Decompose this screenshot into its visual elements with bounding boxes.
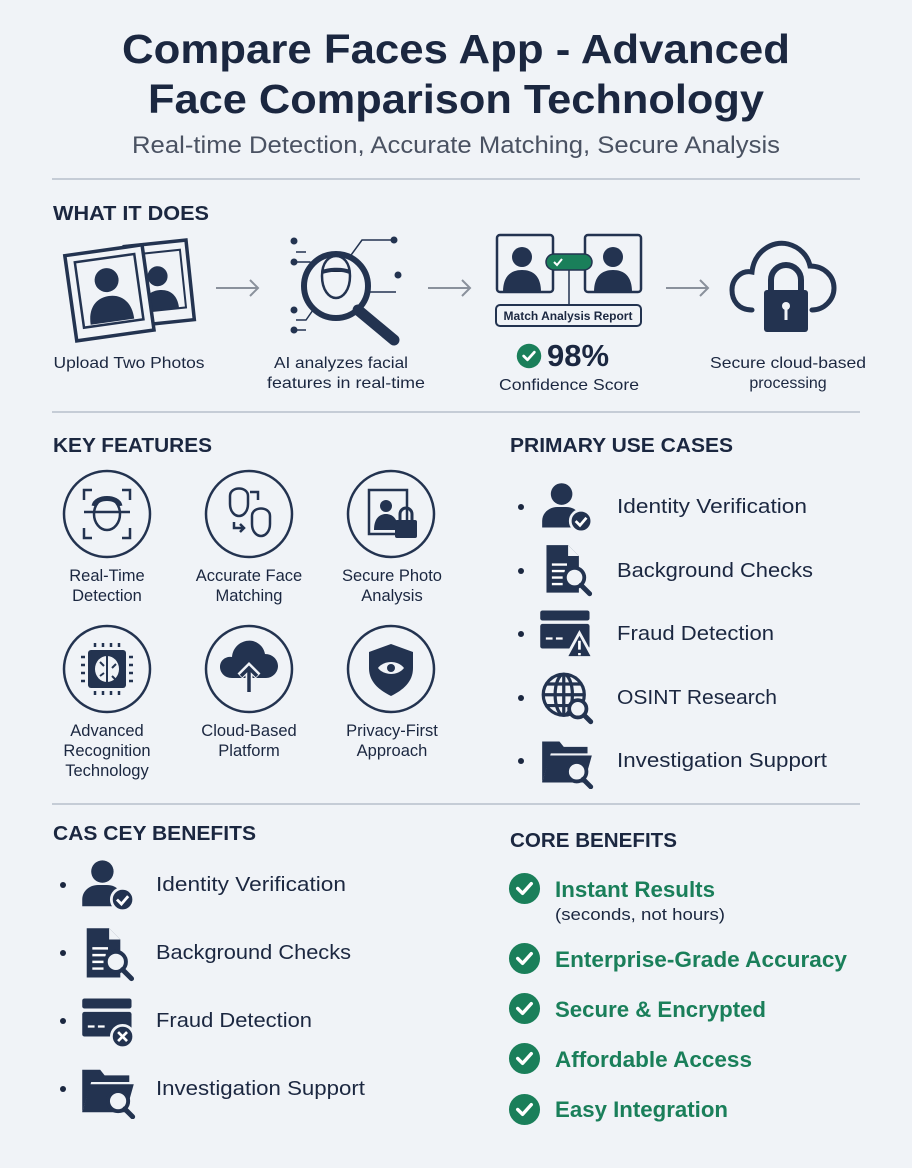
labels: Privacy-First xyxy=(346,722,438,740)
labels: Recognition xyxy=(63,742,151,760)
labels: Detection xyxy=(72,587,142,605)
icon: face matching xyxy=(230,488,270,536)
label: secure: Secure cloud-based xyxy=(710,355,866,372)
title: Face Comparison Technology xyxy=(148,76,764,122)
subtitle: Real-time Detection, Accurate Matching, Secure Analysis xyxy=(132,132,780,159)
panel: cas cey benefits xyxy=(53,823,365,1117)
text: features in real-time xyxy=(267,375,425,392)
label: AI analyzes: AI analyzes facial xyxy=(274,355,408,372)
arrow xyxy=(428,280,470,296)
panel: primary use cases: Background Checks xyxy=(617,559,813,582)
icon: chip brain xyxy=(81,643,133,695)
title xyxy=(122,26,790,122)
icon: magnifier analysis xyxy=(290,236,402,340)
labels: Real-Time xyxy=(69,567,145,585)
labels: Platform xyxy=(218,742,280,760)
panel: primary use cases: Identity Verification xyxy=(617,495,807,518)
panel: primary use cases xyxy=(510,435,827,787)
labels: Technology xyxy=(65,762,149,780)
icon: shield eye xyxy=(369,644,413,696)
score: Confidence Score xyxy=(499,377,639,394)
icon: face scan xyxy=(84,490,130,538)
panel: core benefits: Affordable Access xyxy=(555,1047,752,1072)
panel: cas cey benefits: Background Checks xyxy=(156,941,351,964)
labels: Matching xyxy=(216,587,282,605)
heading: cas cey benefits: CAS CEY BENEFITS xyxy=(53,823,256,845)
labels: Advanced xyxy=(70,722,144,740)
heading: core benefits: CORE BENEFITS xyxy=(510,830,677,852)
icon: two photos xyxy=(65,240,194,341)
panel: primary use cases: Fraud Detection xyxy=(617,622,774,645)
arrow xyxy=(216,280,258,296)
icon: cloud upload xyxy=(220,641,278,692)
panel: cas cey benefits: Investigation Support xyxy=(156,1077,365,1100)
panel: primary use cases: Investigation Support xyxy=(617,749,827,772)
panel: core benefits: (seconds, not hours) xyxy=(555,906,725,924)
heading: primary use cases: PRIMARY USE CASES xyxy=(510,435,733,457)
heading: key features: KEY FEATURES xyxy=(53,435,212,457)
panel: core benefits xyxy=(509,830,848,1125)
labels: Approach xyxy=(357,742,427,760)
title: Compare Faces App - Advanced xyxy=(122,26,790,72)
panel: core benefits: Secure & Encrypted xyxy=(555,997,766,1022)
panel: core benefits: Easy Integration xyxy=(555,1097,728,1122)
panel: primary use cases: OSINT Research xyxy=(617,686,777,709)
labels: Cloud-Based xyxy=(201,722,297,740)
heading: what it does: WHAT IT DOES xyxy=(53,203,209,225)
panel: cas cey benefits: Fraud Detection xyxy=(156,1009,312,1032)
arrow xyxy=(666,280,708,296)
labels: Analysis xyxy=(361,587,423,605)
text: processing xyxy=(749,375,827,392)
labels xyxy=(63,567,442,780)
panel: core benefits: Enterprise-Grade Accuracy xyxy=(555,947,848,972)
icon: match report xyxy=(496,235,641,326)
labels: Accurate Face xyxy=(196,567,302,585)
icon: cloud lock xyxy=(732,243,834,332)
panel: key features xyxy=(53,435,442,780)
label: upload: Upload Two Photos xyxy=(54,355,204,372)
icon: match report: Match Analysis Report xyxy=(504,309,632,323)
icon: secure photo xyxy=(369,490,417,538)
panel: cas cey benefits: Identity Verification xyxy=(156,873,346,896)
score xyxy=(499,338,639,394)
panel: core benefits: Instant Results xyxy=(555,877,715,902)
labels: Secure Photo xyxy=(342,567,442,585)
score: 98% xyxy=(547,338,609,373)
